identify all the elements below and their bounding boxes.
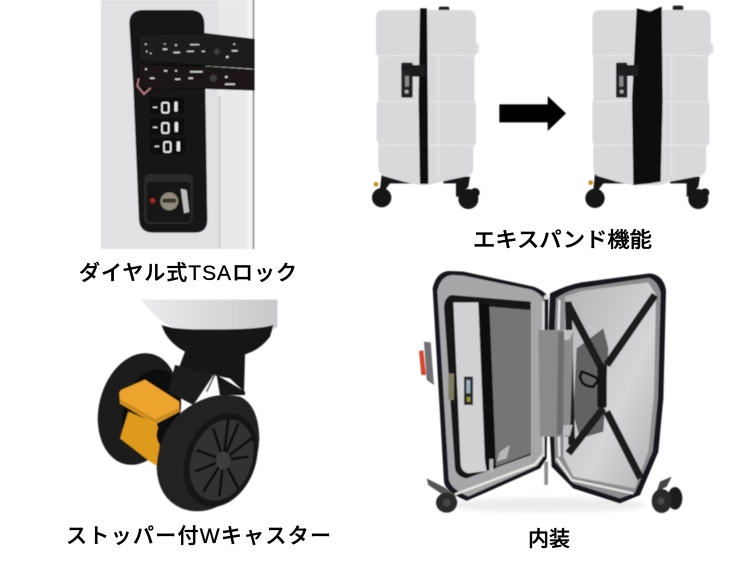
lock latch bars [139, 33, 254, 90]
elastic cross straps [568, 295, 655, 478]
panel: expand function photo [372, 6, 713, 209]
panel: interior photo [419, 271, 682, 513]
pocket label [464, 377, 473, 405]
dial 1 [149, 97, 184, 113]
heading: dial TSA lock: ダイヤル式TSAロック [79, 262, 297, 285]
orange stopper [119, 380, 179, 467]
right shell [547, 273, 666, 504]
telescopic handle cover [538, 330, 574, 437]
suitcase after expanding [585, 6, 713, 209]
left caster [427, 478, 457, 513]
icon: lock body [129, 10, 254, 233]
right caster [652, 477, 682, 513]
casters [372, 175, 480, 209]
axle [157, 422, 177, 448]
dial 3 [150, 138, 185, 155]
front wheel [157, 395, 271, 518]
heading: double caster with stopper: ストッパー付Wキャスター [66, 525, 331, 548]
arrow [499, 96, 566, 131]
key lock [144, 174, 193, 224]
casters [585, 173, 709, 209]
heading: expand function: エキスパンド機能 [473, 229, 652, 252]
zipper pull [544, 462, 548, 485]
dial 2 [149, 119, 185, 135]
external lock tag [419, 342, 434, 385]
left shell [433, 271, 548, 501]
rear wheel [86, 345, 190, 473]
mesh pocket [444, 295, 531, 478]
heading: interior: 内装 [528, 528, 570, 551]
panel: double caster with stopper photo [86, 300, 277, 518]
caster housing [162, 325, 273, 405]
panel: TSA dial lock photo [101, 0, 254, 249]
suitcase before expanding [372, 7, 480, 209]
